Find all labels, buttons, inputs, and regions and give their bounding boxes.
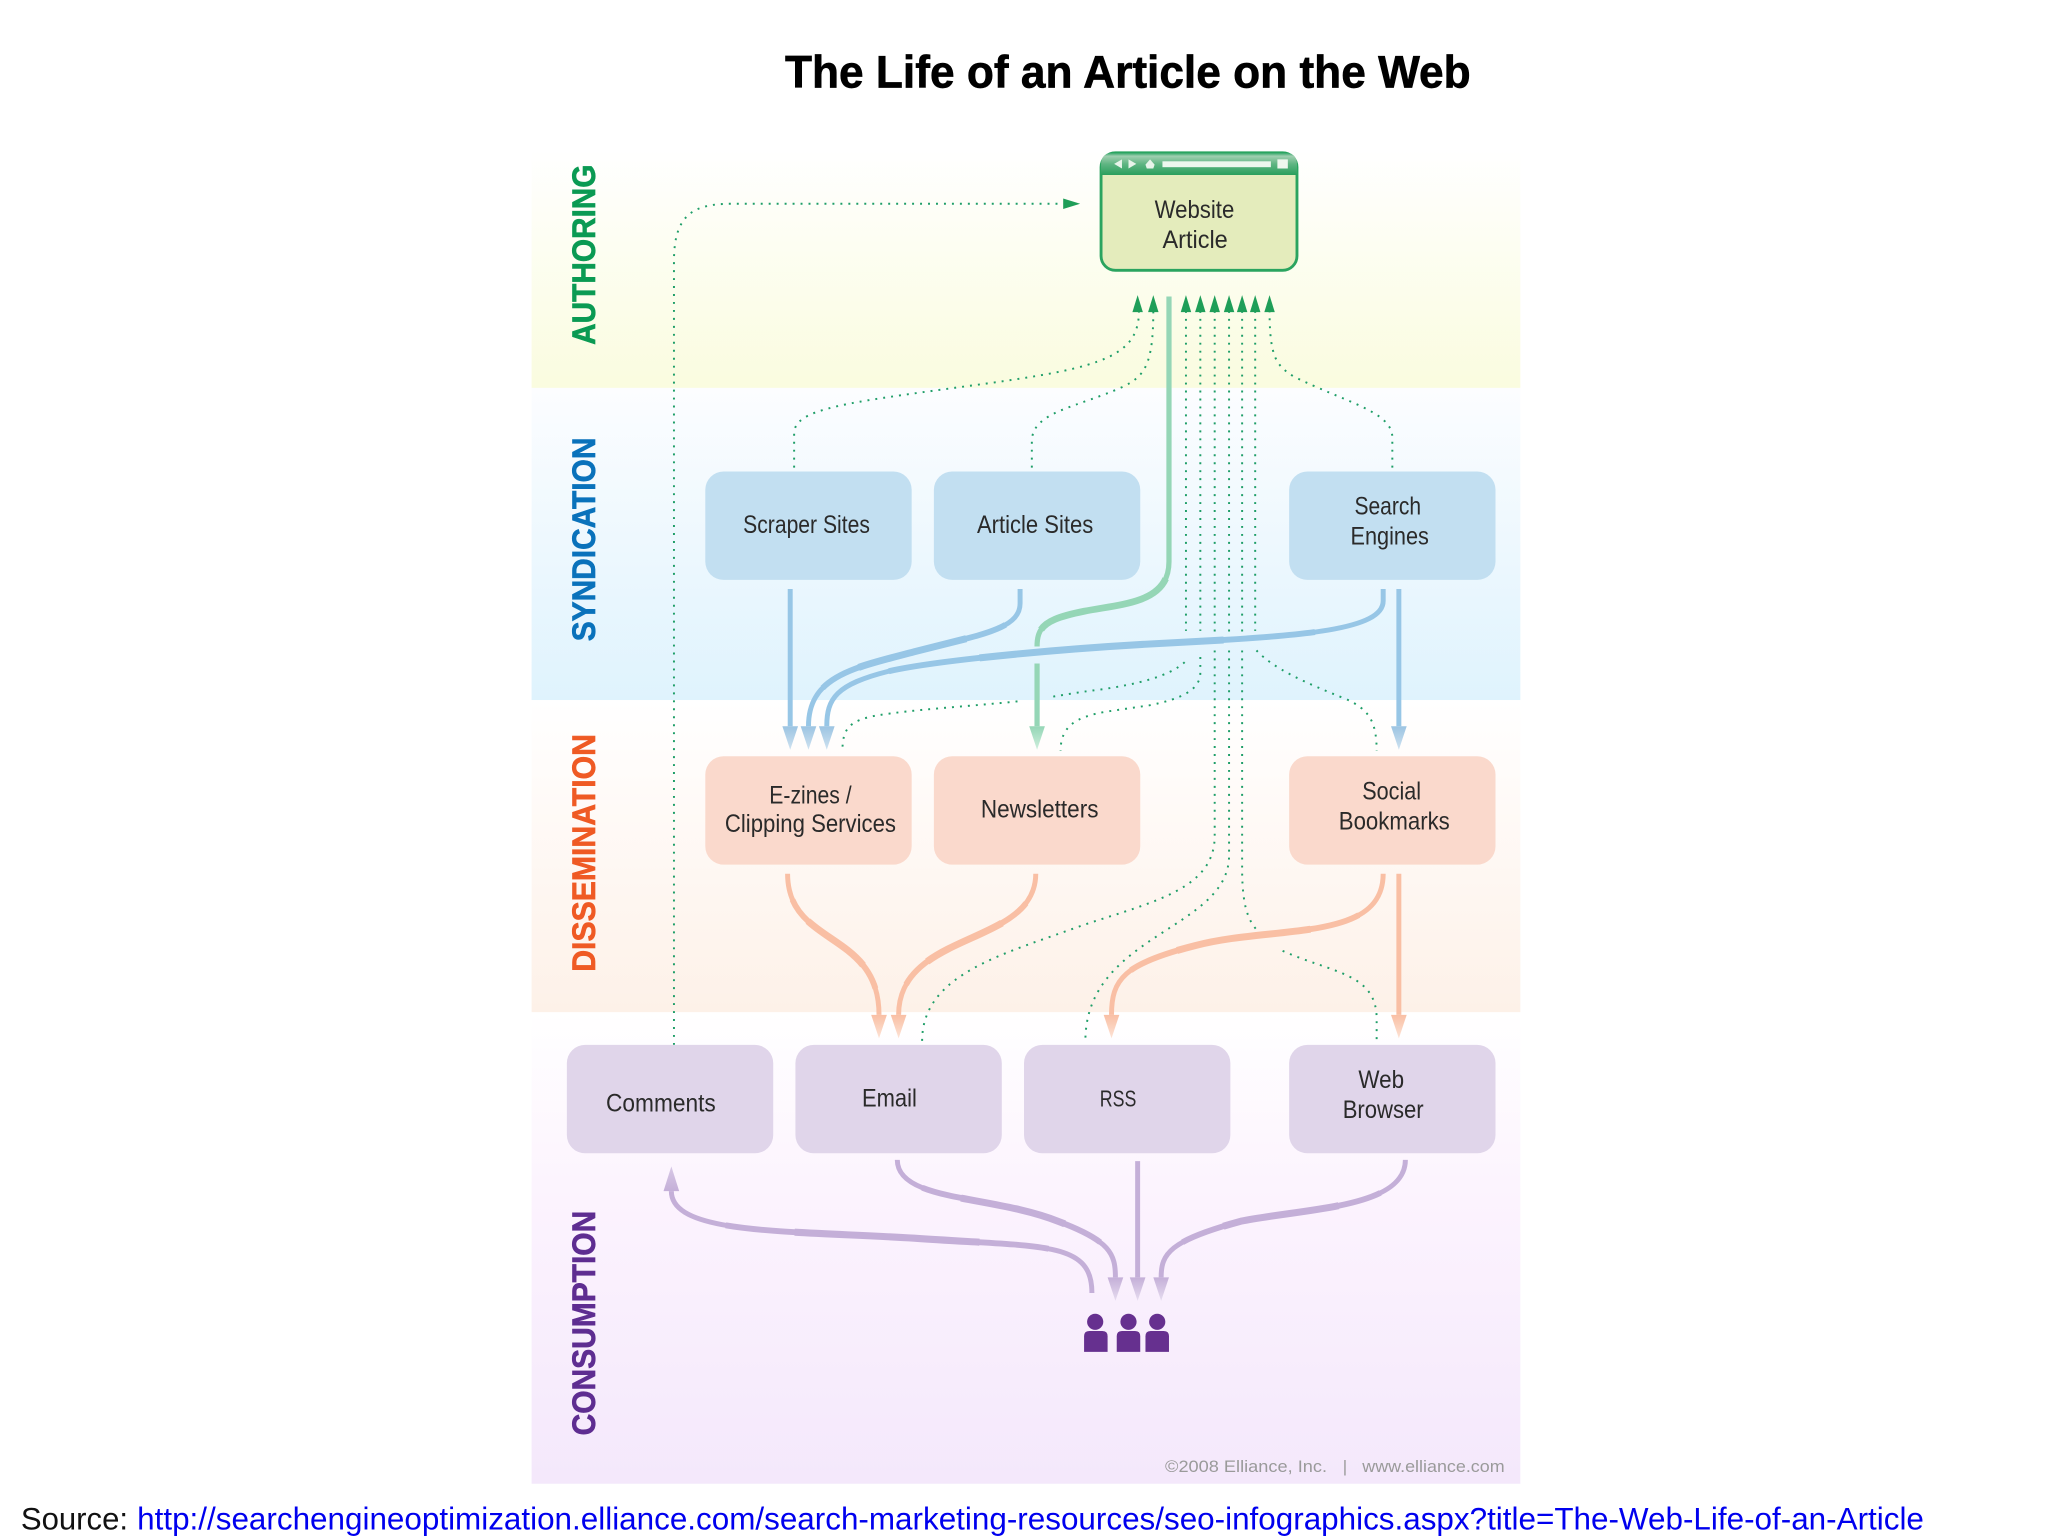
dotted arrow: scraper sites to article [794,311,1139,468]
box: newsletters [934,756,1140,865]
source line: http://searchengineoptimization.elliance.com/search-marketing-resources/seo-infographics.aspx?title=The-Web-Life-of-an-Article [137,1501,1924,1536]
arrows: dissemination to consumption [788,874,1407,1038]
arrow: social bookmarks to web browser [1391,874,1407,1038]
heading: authoring: AUTHORING [565,165,602,345]
label: website article: Article [1162,227,1228,254]
dotted return paths [674,199,1392,1045]
box: web browser [1289,1045,1496,1153]
arrow: article sites to e-zines [801,589,1020,750]
dotted arrow: comments to article [674,199,1080,1045]
box: web browser: Web [1358,1067,1404,1094]
arrow: rss to people [1130,1161,1145,1301]
box: article sites [934,472,1140,580]
arrow: e-zines to email [788,874,887,1038]
dotted arrow: article sites to article [1032,311,1153,468]
dotted arrow: web browser to article [1242,311,1377,1041]
arrow: social bookmarks to rss [1104,874,1383,1038]
box: scraper sites: Scraper Sites [743,512,870,539]
dotted arrow: search engines to article [1270,311,1392,468]
copyright: www.elliance.com [1361,1457,1505,1476]
arrows: consumption [664,1160,1405,1301]
icon: people [1084,1314,1169,1352]
source line: Source: [21,1501,128,1536]
heading: consumption: CONSUMPTION [565,1211,602,1435]
title: The Life of an Article on the Web [785,47,1471,98]
band: consumption [532,1012,1520,1484]
box: e-zines clipping services: Clipping Services [725,811,896,838]
box: newsletters: Newsletters [981,797,1098,824]
box: e-zines clipping services: E-zines / [769,782,852,809]
dotted arrow: email to article [922,311,1215,1041]
box: search engines [1289,472,1496,580]
arrow: search engines to e-zines [819,589,1383,750]
box: article sites: Article Sites [977,512,1093,539]
heading: syndication: SYNDICATION [565,438,602,641]
box: rss [1024,1045,1230,1153]
arrow: search engines to social bookmarks [1391,589,1407,750]
box: comments [567,1045,773,1153]
arrow: scraper sites to e-zines [782,589,798,750]
copyright [1165,1457,1505,1476]
box: search engines: Search [1354,494,1421,521]
arrow: email to people [897,1160,1123,1301]
box: website article [1101,153,1297,270]
band: dissemination [532,700,1520,1012]
box: rss: RSS [1100,1085,1136,1111]
band: authoring [532,150,1520,388]
arrows: syndication to dissemination [782,296,1407,750]
dotted arrow: rss to article [1085,311,1229,1041]
arrowheads into article [1132,295,1275,312]
arrow: newsletters to email [891,874,1036,1038]
browser header bar [1101,153,1297,175]
arrow: web browser to people [1153,1160,1405,1301]
arrow: people to comments [664,1166,1092,1293]
box: email: Email [862,1085,917,1112]
box: social bookmarks [1289,756,1496,865]
copyright: | [1343,1457,1347,1476]
label: website article: Website [1155,197,1234,224]
box: search engines: Engines [1351,524,1429,551]
dotted arrow: social bookmarks to article [1255,311,1377,751]
box: comments: Comments [606,1091,716,1118]
heading: dissemination: DISSEMINATION [565,734,602,972]
box: social bookmarks: Social [1362,778,1421,805]
dotted arrow: newsletters to article [1061,311,1200,751]
box: e-zines clipping services [705,756,912,865]
arrow: article to newsletters [1029,296,1169,750]
box: scraper sites [705,472,912,580]
box: web browser: Browser [1343,1097,1424,1124]
box: social bookmarks: Bookmarks [1339,808,1450,835]
dotted arrow: e-zines to article [842,311,1186,751]
label: website article [1155,197,1234,254]
copyright: ©2008 Elliance, Inc. [1165,1457,1327,1476]
band: syndication [532,388,1520,700]
box: email [795,1045,1002,1153]
